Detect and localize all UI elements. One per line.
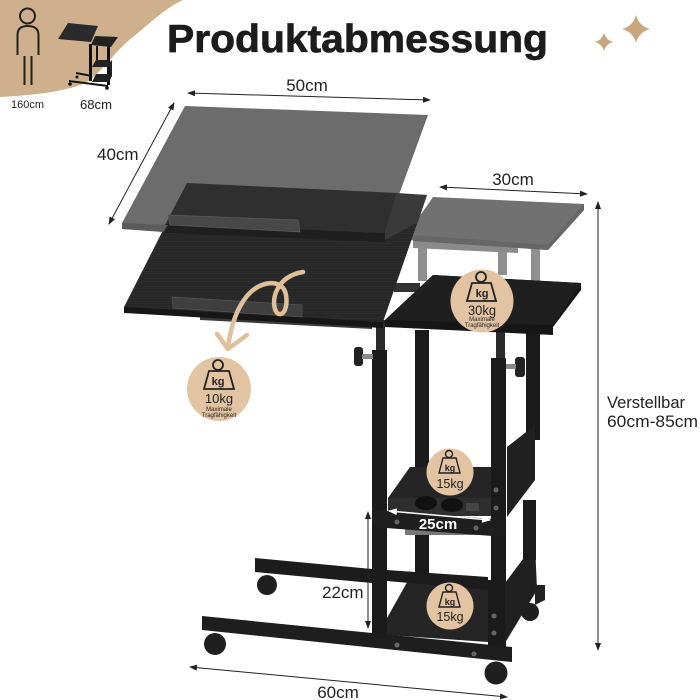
icon: person 160cm <box>18 8 38 85</box>
badge: 30kg capacity: 30kg <box>468 302 496 318</box>
badge: 30kg capacity: kg <box>476 288 488 300</box>
dark side shelf <box>385 275 581 335</box>
badge: 15kg lower shelf <box>426 582 474 630</box>
dimension: 30cm: 30cm <box>492 170 534 189</box>
left and right posts <box>372 350 506 650</box>
cross beam <box>372 510 506 537</box>
badge: 30kg capacity: Maximale <box>469 317 495 323</box>
badge: 15kg tray <box>426 448 474 496</box>
badge: 15kg tray: 15kg <box>436 477 464 491</box>
link bar <box>394 283 420 292</box>
rear posts <box>415 330 540 575</box>
dimension: height adjustable <box>598 202 698 650</box>
ghost side shelf raised <box>408 197 584 281</box>
badge: 15kg tray: kg <box>445 463 455 473</box>
ghost desk top raised <box>122 106 428 242</box>
dimension: 25cm <box>389 511 490 533</box>
badge: 10kg capacity: kg <box>212 376 224 388</box>
dimension: 50cm <box>188 76 430 100</box>
dimension: 22cm: 22cm <box>322 583 364 602</box>
side panels <box>507 425 535 517</box>
base rails and lower shelf <box>202 558 545 684</box>
lower pen groove <box>172 297 302 317</box>
dimension: 25cm: 25cm <box>419 516 457 533</box>
caster wheels <box>257 575 277 595</box>
dimension: height adjustable: Verstellbar <box>607 393 685 412</box>
badge: 30kg capacity: Tragfähigkeit <box>465 323 500 329</box>
badge: 15kg lower shelf: 15kg <box>436 610 464 624</box>
upper pen groove <box>168 215 300 232</box>
dimension: height adjustable: 60cm-85cm <box>607 412 698 431</box>
icon: sparkles <box>595 15 650 51</box>
badge: 15kg lower shelf: kg <box>445 597 455 607</box>
title: Produktabmessung <box>167 18 548 61</box>
corner tan blob <box>0 0 183 97</box>
dimension: 60cm <box>190 667 507 700</box>
badge: 30kg capacity <box>450 270 514 332</box>
badge: 10kg capacity: Maximale <box>206 407 232 413</box>
swirl arrow <box>217 272 303 349</box>
sockets <box>415 496 437 510</box>
badge: 10kg capacity: Tragfähigkeit <box>202 413 237 419</box>
dimension: 50cm: 50cm <box>286 76 328 95</box>
label: 68cm: 68cm <box>80 97 112 112</box>
upper tray with sockets <box>372 467 506 537</box>
dimension: 30cm <box>440 170 587 194</box>
badge: 10kg capacity: 10kg <box>205 391 233 406</box>
dark desk top <box>124 183 427 329</box>
dimension: 40cm <box>97 103 174 224</box>
height knobs <box>354 347 525 377</box>
upper thin posts <box>376 320 505 362</box>
dimension: 40cm: 40cm <box>97 145 139 164</box>
icon: mini desk 68cm <box>58 23 118 90</box>
badge: 10kg capacity <box>187 357 251 421</box>
table frame <box>372 283 540 650</box>
dimension: 22cm <box>322 512 368 628</box>
label: 160cm: 160cm <box>11 99 44 111</box>
